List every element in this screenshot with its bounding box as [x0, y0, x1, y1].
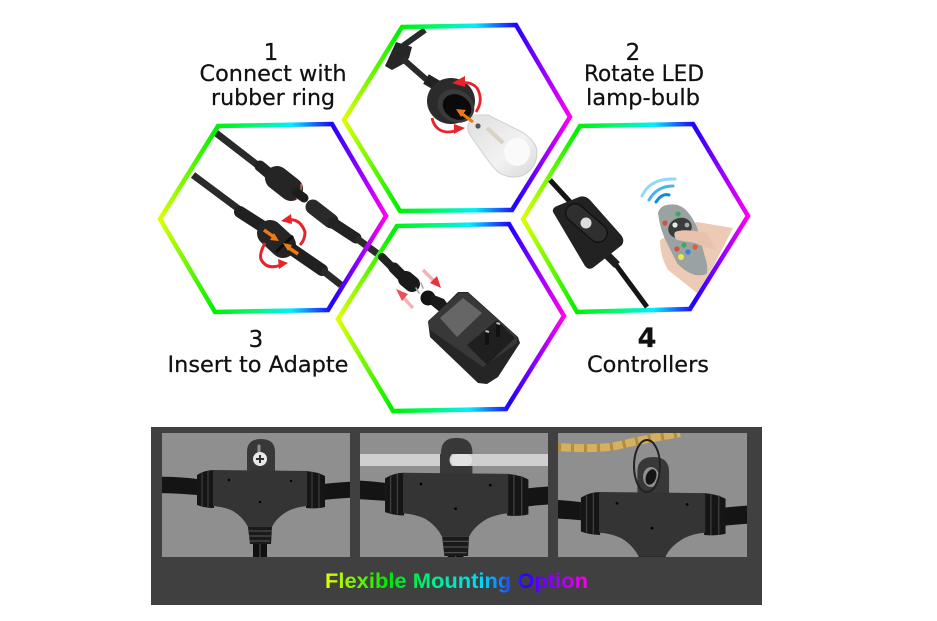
icon: red rotation arrows [432, 76, 480, 134]
photo: rod mounting [360, 433, 548, 557]
icon: light bulb [468, 115, 537, 177]
heading: step 2: lamp-bulb [586, 85, 700, 111]
heading: step 2 [584, 40, 704, 111]
icon: inline switch [550, 180, 647, 307]
icon: direction arrows [396, 270, 441, 308]
caption: Flexible Mounting Option [325, 570, 588, 593]
icon: plug connector [382, 257, 423, 293]
panel: step 2 rotate LED lamp-bulb [344, 25, 570, 211]
heading: step 1 [200, 40, 346, 111]
heading: step 4: Controllers [587, 352, 709, 378]
heading: step 3 [168, 327, 348, 378]
heading: step 1: Connect with [200, 61, 346, 87]
heading: step 3: 3 [249, 327, 263, 353]
heading: step 1: rubber ring [211, 85, 335, 111]
icon: hand holding remote [658, 204, 733, 293]
heading: step 4 [587, 323, 709, 378]
hexagon frame: step 2 [344, 25, 570, 211]
panel: step 1 connect with rubber ring [160, 124, 386, 312]
icon: wifi signal [642, 179, 675, 202]
photo: screw mounting [162, 433, 350, 557]
panel: flexible mounting option [150, 427, 771, 610]
panel: step 4 controllers [523, 124, 748, 312]
heading: step 3: Insert to Adapte [168, 352, 348, 378]
hexagon frame: step 1 [160, 124, 386, 312]
heading: step 2: Rotate LED [584, 61, 704, 87]
icon: lamp socket [385, 30, 480, 129]
heading: step 1: 1 [264, 40, 278, 66]
hexagon frame: step 3 [338, 224, 564, 411]
heading: step 2: 2 [626, 40, 640, 66]
photo: rope hanging [558, 433, 747, 557]
icon: joined cable connector with red arrows [193, 175, 341, 285]
icon: separated cable connector [216, 133, 382, 257]
icon: power adapter [420, 290, 520, 384]
panel: step 3 insert to adapter [338, 224, 564, 411]
heading: step 4: 4 [638, 323, 656, 354]
hexagon frame: step 4 [523, 124, 748, 312]
